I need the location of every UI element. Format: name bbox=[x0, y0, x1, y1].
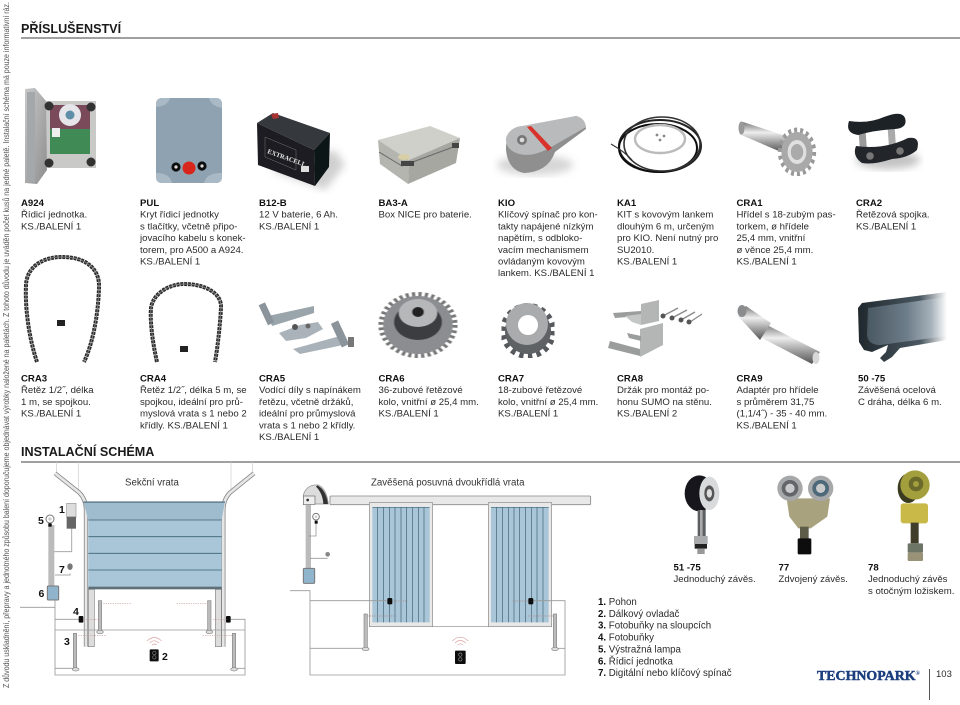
icon: key switch bbox=[497, 116, 586, 175]
text: KIO description: lankem. KS./BALENÍ 1 bbox=[498, 268, 595, 279]
text: KIO description: Klíčový spínač pro kon- bbox=[498, 210, 598, 221]
text: CRA7 description: 18-zubové řetězové bbox=[498, 385, 582, 396]
text: 78 description: s otočným ložiskem. bbox=[868, 586, 954, 597]
text: KIO description: KIO bbox=[498, 198, 516, 209]
text: CRA8 description: Držák pro montáž po- bbox=[617, 385, 709, 396]
text: CRA1 description: KS./BALENÍ 1 bbox=[736, 256, 797, 268]
callouts: numbers 1-7 bbox=[38, 504, 168, 663]
logo: Technopark: TECHNOPARK bbox=[817, 669, 916, 684]
text: PUL description: KS./BALENÍ 1 bbox=[140, 256, 200, 268]
text: 77 description: 77 bbox=[778, 562, 789, 574]
icon: 18-tooth sprocket bbox=[504, 303, 552, 355]
text: CRA6 description: kolo, vnitřní ø 25,4 mm. bbox=[378, 397, 479, 408]
text: CRA9 description: Adaptér pro hřídele bbox=[736, 385, 819, 396]
legend: numbered list: Výstražná lampa bbox=[609, 644, 681, 655]
text: CRA9 description: CRA9 bbox=[736, 374, 763, 384]
callouts: numbers 1-7: 4 bbox=[73, 606, 79, 618]
text: 51-75 description: 51 -75 bbox=[674, 562, 701, 574]
text: CRA1 description: 25,4 mm, vnitřní bbox=[736, 233, 806, 244]
legend: numbered list: 4. bbox=[598, 633, 606, 644]
product: CRA1 bbox=[736, 122, 836, 268]
text: gate title: Zavěšená posuvná dvoukřídlá vrata bbox=[371, 478, 525, 488]
legend: numbered list: 7. bbox=[598, 668, 606, 679]
icon: battery: EXTRACELL bbox=[266, 148, 307, 169]
text: PUL description: PUL bbox=[140, 198, 159, 209]
text: CRA8 description: CRA8 bbox=[617, 374, 644, 384]
text: CRA8 description: KS./BALENÍ 2 bbox=[617, 409, 677, 420]
heading: Instalační schéma: INSTALAČNÍ SCHÉMA bbox=[21, 444, 154, 459]
legend: numbered list: Fotobuňky na sloupcích bbox=[609, 621, 711, 632]
text: KIO description: takty napájené nízkým bbox=[498, 221, 593, 232]
product: B12-B bbox=[257, 113, 345, 232]
legend: numbered list: 5. bbox=[598, 644, 606, 655]
legend: numbered list: Řídicí jednotka bbox=[609, 656, 673, 667]
text: B12-B description: B12-B bbox=[259, 198, 287, 209]
text: CRA1 description: torkem, ø hřídele bbox=[736, 221, 809, 232]
icon: chain 1 m bbox=[26, 257, 99, 362]
text: CRA6 description: CRA6 bbox=[378, 374, 405, 384]
product: CRA9 bbox=[736, 305, 827, 431]
text: CRA6 description: 36-zubové řetězové bbox=[378, 385, 463, 396]
product: CRA8 bbox=[608, 300, 712, 420]
callouts: numbers 1-7: 7 bbox=[59, 564, 65, 576]
icon: C rail bbox=[858, 292, 947, 362]
icon: wall brackets and bolts bbox=[608, 300, 702, 357]
icon: double hanger bbox=[777, 476, 833, 554]
text: CRA9 description: s průměrem 31,75 bbox=[736, 397, 814, 408]
text: CRA3 description: Řetěz 1/2˝, délka bbox=[21, 385, 94, 396]
icon: cover with buttons bbox=[156, 98, 222, 183]
text: 50-75 description: Závěšená ocelová bbox=[858, 385, 937, 396]
text: CRA5 description: Vodící díly s napínákem bbox=[259, 385, 361, 396]
text: CRA5 description: CRA5 bbox=[259, 374, 286, 384]
diagram: sectional door bbox=[20, 462, 254, 675]
text: BA3-A description: BA3-A bbox=[378, 198, 408, 209]
text: CRA8 description: honu SUMO na stěnu. bbox=[617, 397, 712, 408]
legend: numbered list: Digitální nebo klíčový spínač bbox=[609, 668, 732, 679]
text: CRA7 description: kolo, vnitřní ø 25,4 mm. bbox=[498, 397, 598, 408]
product: CRA6 bbox=[378, 295, 479, 420]
product: CRA3 bbox=[21, 257, 99, 420]
text: CRA3 description: 1 m, se spojkou. bbox=[21, 397, 91, 408]
page number bbox=[929, 669, 952, 700]
text: 78 description: 78 bbox=[868, 562, 879, 574]
callouts: numbers 1-7: 3 bbox=[64, 636, 70, 648]
product: hanger 78 bbox=[868, 470, 954, 597]
text: CRA7 description: CRA7 bbox=[498, 374, 524, 384]
text: door title: Sekční vrata bbox=[125, 478, 179, 488]
text: CRA2 description: Řetězová spojka. bbox=[856, 210, 930, 221]
legend: numbered list: Dálkový ovladač bbox=[609, 609, 679, 620]
product: hanger 51-75 bbox=[674, 475, 756, 585]
callouts: numbers 1-7: 5 bbox=[38, 515, 44, 527]
text: 50-75 description: 50 -75 bbox=[858, 374, 886, 384]
legend: numbered list: 2. bbox=[598, 609, 606, 620]
product: 50-75 bbox=[858, 292, 947, 408]
icon: chain 5 m bbox=[151, 284, 221, 362]
text: CRA7 description: KS./BALENÍ 1 bbox=[498, 409, 558, 420]
text: KIO description: napětím, s odbloko- bbox=[498, 233, 582, 244]
icon: chain link bbox=[848, 114, 920, 169]
callouts: numbers 1-7: 6 bbox=[38, 588, 44, 600]
text: CRA5 description: vrata s 1 nebo 2 křídly. bbox=[259, 420, 355, 431]
text: KA1 description: KIT s kovovým lankem bbox=[617, 210, 713, 221]
heading: Příslušenství: PŘÍSLUŠENSTVÍ bbox=[21, 21, 122, 36]
text: CRA3 description: KS./BALENÍ 1 bbox=[21, 409, 81, 420]
product: KA1 bbox=[611, 117, 718, 268]
product: CRA4 bbox=[140, 284, 247, 431]
text: CRA3 description: CRA3 bbox=[21, 374, 47, 384]
text: KA1 description: dlouhým 6 m, určeným bbox=[617, 221, 714, 232]
logo: Technopark: ® bbox=[916, 670, 921, 677]
text: PUL description: Kryt řídicí jednotky bbox=[140, 210, 219, 221]
text: KIO description: vacím mechanismem bbox=[498, 245, 589, 256]
product: CRA5 bbox=[259, 302, 361, 443]
text: 77 description: Zdvojený závěs. bbox=[778, 574, 848, 585]
text: CRA1 description: Hřídel s 18-zubým pas- bbox=[736, 210, 836, 221]
product: hanger 77 bbox=[777, 476, 848, 585]
text: KIO description: ovládaným kovovým bbox=[498, 256, 585, 268]
icon: control unit bbox=[25, 88, 96, 184]
text: A924 description: A924 bbox=[21, 198, 45, 209]
product: A924 bbox=[21, 88, 96, 232]
legend: numbered list: Fotobuňky bbox=[609, 633, 654, 644]
legend: numbered list: 1. Pohon bbox=[598, 597, 637, 608]
icon: shaft adapter bbox=[738, 305, 820, 364]
text: A924 description: KS./BALENÍ 1 bbox=[21, 221, 81, 232]
text: CRA4 description: CRA4 bbox=[140, 374, 167, 384]
product: CRA7 bbox=[498, 303, 598, 420]
text: CRA4 description: Řetěz 1/2˝, délka 5 m, se bbox=[140, 385, 247, 396]
text: CRA4 description: spojkou, ideální pro prů- bbox=[140, 397, 243, 408]
text: KA1 description: KA1 bbox=[617, 198, 637, 209]
callouts: numbers 1-7: 2 bbox=[162, 651, 168, 663]
icon: battery box bbox=[378, 126, 460, 184]
text: KA1 description: SU2010. bbox=[617, 245, 654, 256]
icon: steel cable coil bbox=[611, 117, 701, 172]
text: BA3-A description: Box NICE pro baterie. bbox=[378, 210, 472, 221]
product: KIO bbox=[497, 116, 598, 279]
text: A924 description: Řídicí jednotka. bbox=[21, 210, 87, 221]
product: PUL bbox=[139, 98, 246, 268]
icon: shaft with sprocket bbox=[738, 122, 813, 173]
text: CRA5 description: KS./BALENÍ 1 bbox=[259, 432, 319, 443]
legend: numbered list: 3. bbox=[598, 621, 606, 632]
text: PUL description: torem, pro A500 a A924. bbox=[140, 245, 243, 256]
text: CRA9 description: (1,1/4˝) - 35 - 40 mm. bbox=[736, 409, 827, 420]
text: KA1 description: pro KIO. Není nutný pro bbox=[617, 233, 718, 244]
text: CRA5 description: řetězu, včetně držáků, bbox=[259, 397, 353, 408]
text: KA1 description: KS./BALENÍ 1 bbox=[617, 256, 677, 268]
text: PUL description: s tlačítky, včetně připo- bbox=[140, 221, 237, 232]
icon: swivel hanger bbox=[898, 470, 930, 561]
text: 78 description: Jednoduchý závěs bbox=[868, 574, 948, 585]
text: CRA9 description: KS./BALENÍ 1 bbox=[736, 420, 797, 431]
product: BA3-A bbox=[378, 126, 472, 221]
icon: guide parts bbox=[259, 302, 354, 354]
text: B12-B description: 12 V baterie, 6 Ah. bbox=[259, 210, 338, 221]
product: CRA2 bbox=[848, 114, 930, 232]
text: PUL description: jovacího kabelu s konek- bbox=[139, 233, 246, 244]
text: 50-75 description: C dráha, délka 6 m. bbox=[858, 397, 942, 408]
diagram: sliding double gate bbox=[290, 478, 591, 675]
icon: 36-tooth sprocket bbox=[382, 295, 454, 355]
text: CRA5 description: ideální pro průmyslová bbox=[259, 409, 356, 420]
text: B12-B description: KS./BALENÍ 1 bbox=[259, 221, 319, 232]
icon: single hanger bbox=[685, 475, 719, 554]
text: CRA2 description: CRA2 bbox=[856, 198, 882, 209]
page number: 103 bbox=[936, 669, 952, 680]
text: 51-75 description: Jednoduchý závěs. bbox=[674, 574, 756, 585]
callouts: numbers 1-7: 1 bbox=[59, 504, 65, 516]
text: CRA4 description: křídly. KS./BALENÍ 1 bbox=[140, 420, 228, 431]
text: CRA2 description: KS./BALENÍ 1 bbox=[856, 221, 916, 232]
text: CRA1 description: ø věnce 25,4 mm. bbox=[736, 245, 813, 256]
legend: numbered list: 6. bbox=[598, 656, 606, 667]
text: CRA4 description: myslová vrata s 1 nebo 2 bbox=[140, 409, 247, 420]
text: CRA6 description: KS./BALENÍ 1 bbox=[378, 409, 439, 420]
text: CRA1 description: CRA1 bbox=[736, 198, 763, 209]
